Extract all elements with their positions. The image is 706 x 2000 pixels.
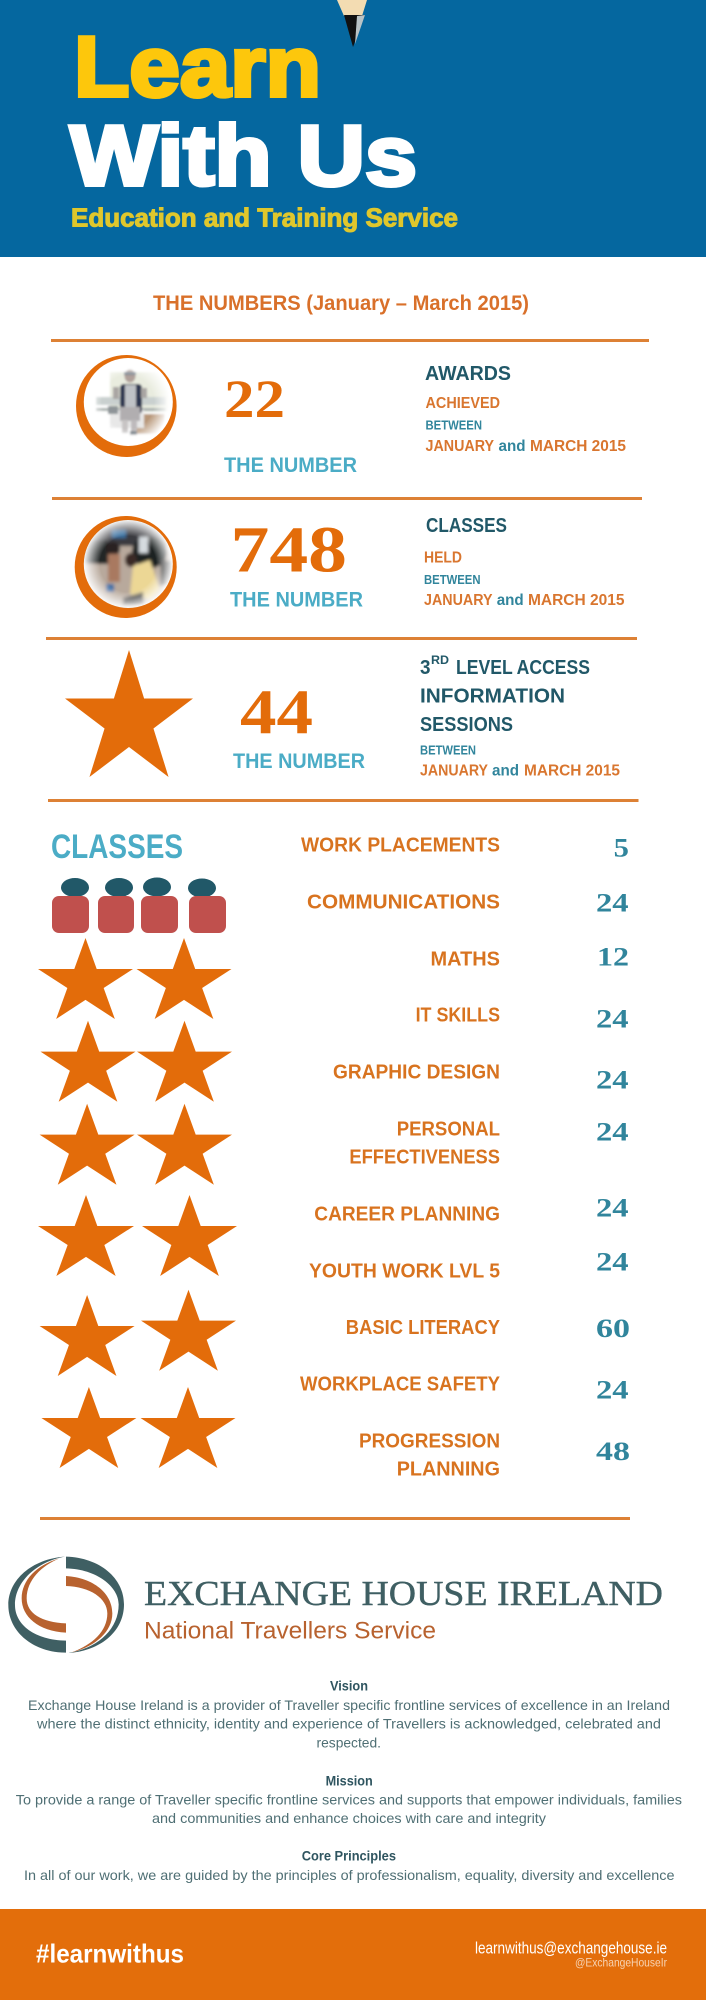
panel: access sessions — [65, 650, 620, 779]
icon: pencil tip — [337, 0, 367, 47]
text: classes description: JANUARY — [424, 592, 493, 609]
text: awards description: ACHIEVED — [426, 395, 500, 412]
icon: swirl emblem — [8, 1557, 124, 1653]
text: awards description: MARCH 2015 — [530, 438, 626, 455]
text: sessions description — [420, 653, 620, 779]
list: class names: GRAPHIC DESIGN — [333, 1061, 500, 1083]
list: class names: BASIC LITERACY — [346, 1317, 501, 1339]
list: class names: WORKPLACE SAFETY — [300, 1374, 501, 1396]
stat: 22: 22 — [224, 369, 285, 429]
text: classes description: BETWEEN — [424, 573, 480, 587]
twitter handle: @ExchangeHouseIr — [575, 1956, 667, 1970]
text: sessions description: SESSIONS — [420, 713, 513, 736]
list: class counts — [596, 834, 630, 1466]
text: awards description: BETWEEN — [426, 419, 482, 433]
list: class counts: 24 — [596, 1066, 629, 1095]
title: Learn: Learn — [74, 20, 321, 115]
text: classes description: and — [497, 592, 524, 609]
logo: Exchange House Ireland — [8, 1557, 663, 1653]
text block: vision — [28, 1679, 670, 1751]
list: class names — [300, 835, 501, 1480]
header banner — [0, 0, 706, 257]
list: class counts: 5 — [614, 834, 629, 863]
text: awards description: JANUARY — [426, 438, 494, 455]
hashtag: #learnwithus — [36, 1939, 184, 1969]
text block: vision: where the distinct ethnicity, identity and experience of Travellers is acknowledged, celebrated and — [36, 1715, 661, 1731]
list: class names: MATHS — [430, 948, 500, 970]
title: With Us: With Us — [70, 109, 417, 204]
icon: people row — [52, 878, 226, 933]
text block: core principles: In all of our work, we are guided by the principles of professionalism, equality, diversity and excellence — [24, 1867, 675, 1883]
text: classes description — [424, 514, 625, 609]
panel: classes breakdown — [38, 828, 630, 1480]
text: classes description: HELD — [424, 549, 462, 566]
list: class names: WORK PLACEMENTS — [301, 835, 500, 857]
list: class names: EFFECTIVENESS — [349, 1147, 500, 1169]
icon: portrait badge — [76, 355, 177, 457]
list: class counts: 24 — [596, 1194, 629, 1223]
text: awards description: and — [498, 438, 526, 455]
list: class counts: 60 — [596, 1314, 630, 1343]
text block: mission: To provide a range of Traveller specific frontline services and supports that empower individuals, families — [16, 1791, 682, 1807]
list: class names: PERSONAL — [397, 1118, 500, 1140]
text block: mission: Mission — [326, 1774, 373, 1789]
list: class names: CAREER PLANNING — [314, 1203, 500, 1225]
text: awards description — [425, 362, 626, 455]
list: class names: PLANNING — [397, 1458, 500, 1480]
footer bar — [0, 1909, 706, 2000]
stat: 44: 44 — [240, 676, 313, 747]
text: sessions description: and — [492, 762, 519, 779]
icon: star rows — [38, 938, 237, 1468]
text: sessions description: LEVEL ACCESS — [456, 656, 590, 679]
list: class names: IT SKILLS — [416, 1005, 500, 1027]
stat: 748: 748 — [230, 514, 347, 586]
list: class names: YOUTH WORK LVL 5 — [309, 1260, 500, 1282]
icon: classroom badge — [75, 516, 177, 618]
list: class counts: 24 — [596, 1248, 629, 1277]
list: class counts: 24 — [596, 888, 629, 917]
text: sessions description: BETWEEN — [420, 744, 476, 758]
subtitle: Education and Training Service — [71, 202, 458, 232]
text block: vision: Vision — [330, 1679, 368, 1694]
text: classes description: CLASSES — [426, 514, 507, 537]
text block: mission — [16, 1774, 682, 1826]
text: awards description: AWARDS — [425, 362, 511, 385]
text: classes description: MARCH 2015 — [528, 592, 625, 609]
text: sessions description: RD — [431, 653, 449, 667]
list: class names: COMMUNICATIONS — [307, 892, 500, 914]
heading: classes: CLASSES — [51, 828, 183, 866]
text: sessions description: INFORMATION — [420, 684, 565, 707]
list: class counts: 24 — [596, 1376, 629, 1405]
text block: vision: respected. — [316, 1735, 381, 1751]
list: class counts: 12 — [597, 943, 629, 972]
panel: awards — [76, 355, 626, 477]
text: sessions description: 3 — [420, 656, 430, 679]
list: class counts: 24 — [596, 1005, 629, 1034]
logo tagline: National Travellers Service — [144, 1617, 436, 1644]
list: class counts: 48 — [596, 1437, 630, 1466]
list: class counts: 24 — [596, 1118, 629, 1147]
label: the number: THE NUMBER — [233, 750, 365, 773]
icon: star — [65, 650, 193, 777]
text block: mission: and communities and enhance choices with care and integrity — [152, 1810, 546, 1826]
text block: core principles — [24, 1849, 675, 1883]
text: sessions description: MARCH 2015 — [524, 762, 620, 779]
list: class names: PROGRESSION — [359, 1430, 500, 1452]
text block: vision: Exchange House Ireland is a provider of Traveller specific frontline services of excellence in an Ireland — [28, 1697, 670, 1713]
text: sessions description: JANUARY — [420, 762, 488, 779]
heading: the numbers: THE NUMBERS (January – March 2015) — [153, 292, 529, 315]
logo name: EXCHANGE HOUSE IRELAND — [144, 1574, 663, 1613]
label: the number: THE NUMBER — [224, 454, 357, 477]
panel: classes held — [75, 514, 625, 618]
label: the number: THE NUMBER — [230, 589, 363, 612]
text block: core principles: Core Principles — [302, 1849, 396, 1864]
